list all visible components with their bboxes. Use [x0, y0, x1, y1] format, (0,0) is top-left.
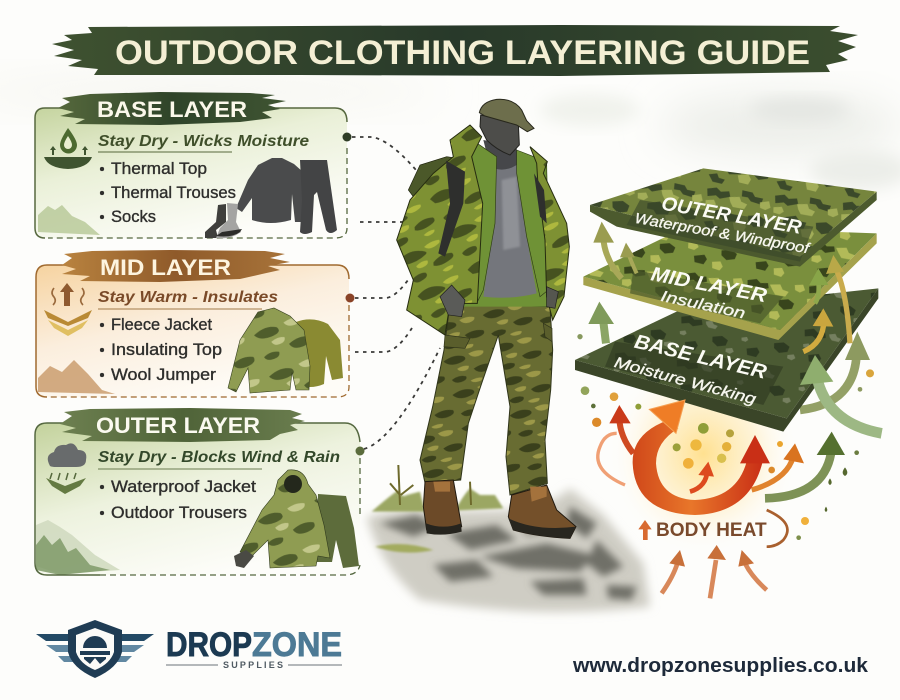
cap — [479, 99, 534, 132]
mid connector dot — [346, 294, 354, 302]
icon: rising warmth — [44, 283, 92, 336]
mid label band — [630, 270, 783, 323]
backpack straps — [438, 161, 547, 257]
right boot — [508, 485, 576, 538]
arrow: rising green upper — [809, 268, 828, 303]
arrow: orange right — [752, 443, 804, 490]
panel: mid layer — [36, 250, 354, 397]
grey base layer top — [483, 165, 537, 298]
mid item list — [100, 316, 222, 384]
body heat glow — [607, 350, 800, 557]
base layer highlight — [502, 177, 520, 250]
thermal trousers illustration — [300, 160, 337, 234]
arrow: rising gold long — [826, 255, 850, 343]
mid item list: Wool Jumper — [111, 366, 217, 384]
mid plate subtitle: Insulation — [659, 288, 747, 322]
waterproof jacket illustration — [234, 470, 330, 568]
base item list: Thermal Top — [111, 160, 207, 178]
socks illustration — [205, 203, 242, 238]
base item list — [100, 160, 236, 226]
body heat label: BODY HEAT — [656, 520, 767, 541]
mid header brush — [62, 250, 290, 282]
title banner — [52, 25, 858, 76]
outer plate — [590, 168, 877, 267]
outer heading: OUTER LAYER — [96, 413, 260, 438]
mid heading: MID LAYER — [100, 255, 231, 280]
title brush stroke — [52, 25, 858, 76]
base plate title: BASE LAYER — [632, 331, 769, 384]
base connector dot — [342, 132, 352, 142]
mid subtitle: Stay Warm - Insulates — [98, 289, 278, 306]
arrow: rising sage right — [800, 332, 870, 410]
left boot — [423, 480, 462, 535]
mid plate — [583, 227, 877, 340]
dotted connector lines — [352, 137, 440, 449]
grass tufts — [372, 465, 503, 512]
website url: www.dropzonesupplies.co.uk — [572, 655, 869, 677]
rocky ground — [367, 488, 650, 612]
heat label swooshes — [638, 510, 787, 547]
logo wordmark: ZONE — [252, 626, 342, 664]
mid item list: Insulating Top — [111, 341, 222, 359]
outdoor trousers illustration — [316, 494, 359, 568]
icon: rain cloud — [46, 443, 86, 494]
base subtitle: Stay Dry - Wicks Moisture — [98, 133, 309, 150]
background ink wash — [0, 74, 900, 190]
outer panel background — [35, 423, 360, 575]
thermal top illustration — [236, 158, 308, 223]
base heading: BASE LAYER — [97, 97, 247, 122]
heat particles — [577, 334, 874, 540]
mid panel mountain wash — [38, 360, 115, 394]
base label band — [605, 342, 783, 405]
backpack — [408, 157, 470, 257]
fleece jacket illustration — [228, 308, 310, 393]
base panel background — [35, 108, 347, 238]
balaclava head — [480, 115, 519, 155]
arrows rising from the ground — [662, 545, 767, 598]
base panel mountain wash — [38, 205, 100, 235]
arrow: green left straight — [588, 302, 614, 343]
outer plate subtitle: Waterproof & Windproof — [633, 211, 812, 258]
arrow: small inner — [690, 462, 714, 492]
arrow: red left — [609, 405, 633, 453]
mid panel background — [36, 265, 349, 397]
mid item list: Fleece Jacket — [111, 316, 212, 334]
logo wordmark: DROP — [166, 626, 252, 664]
outer item list — [100, 478, 256, 522]
logo wordmark — [166, 626, 342, 664]
logo wings — [36, 634, 154, 662]
torso backing — [450, 153, 552, 307]
arrow: large U body heat — [633, 400, 770, 515]
cargo pockets — [444, 323, 552, 348]
outer subtitle: Stay Dry - Blocks Wind & Rain — [98, 449, 340, 466]
right glove — [547, 287, 558, 308]
wool jumper illustration — [296, 319, 343, 387]
outer connector dot — [356, 446, 364, 456]
arrow: rising gold inner — [803, 308, 833, 352]
neck — [483, 140, 517, 170]
arrow: pale green right arc — [800, 355, 882, 433]
outer item list: Outdoor Trousers — [111, 504, 247, 522]
outer header brush — [60, 408, 305, 442]
left glove — [440, 285, 465, 317]
mid plate title: MID LAYER — [649, 263, 769, 307]
base plate — [575, 288, 878, 432]
base item list: Thermal Trouses — [111, 184, 236, 202]
logo shield — [68, 620, 122, 678]
main figure in layered clothing — [367, 99, 650, 612]
arrow: pale left arc — [598, 433, 625, 485]
outer camo jacket — [397, 125, 569, 335]
panel: outer layer — [35, 408, 364, 575]
base item list: Socks — [111, 208, 156, 226]
title text: OUTDOOR CLOTHING LAYERING GUIDE — [115, 34, 810, 72]
icon: water drop — [44, 128, 92, 169]
base header brush — [58, 92, 286, 125]
panel: base layer — [35, 92, 352, 238]
outer item list: Waterproof Jacket — [111, 478, 256, 496]
logo tagline: SUPPLIES — [223, 660, 283, 670]
arrow: olive left small — [620, 243, 637, 273]
green fleece mid layer — [457, 138, 548, 303]
outer plate title: OUTER LAYER — [660, 194, 803, 239]
outer panel mountains — [36, 520, 120, 575]
base plate subtitle: Moisture Wicking — [612, 354, 758, 408]
arrow: olive left upper — [593, 222, 622, 278]
layer stack diagram — [575, 168, 882, 598]
arrow: dark olive — [765, 432, 845, 498]
logo: Dropzone Supplies — [36, 620, 342, 678]
outer label band — [627, 200, 813, 262]
trousers — [420, 303, 553, 495]
